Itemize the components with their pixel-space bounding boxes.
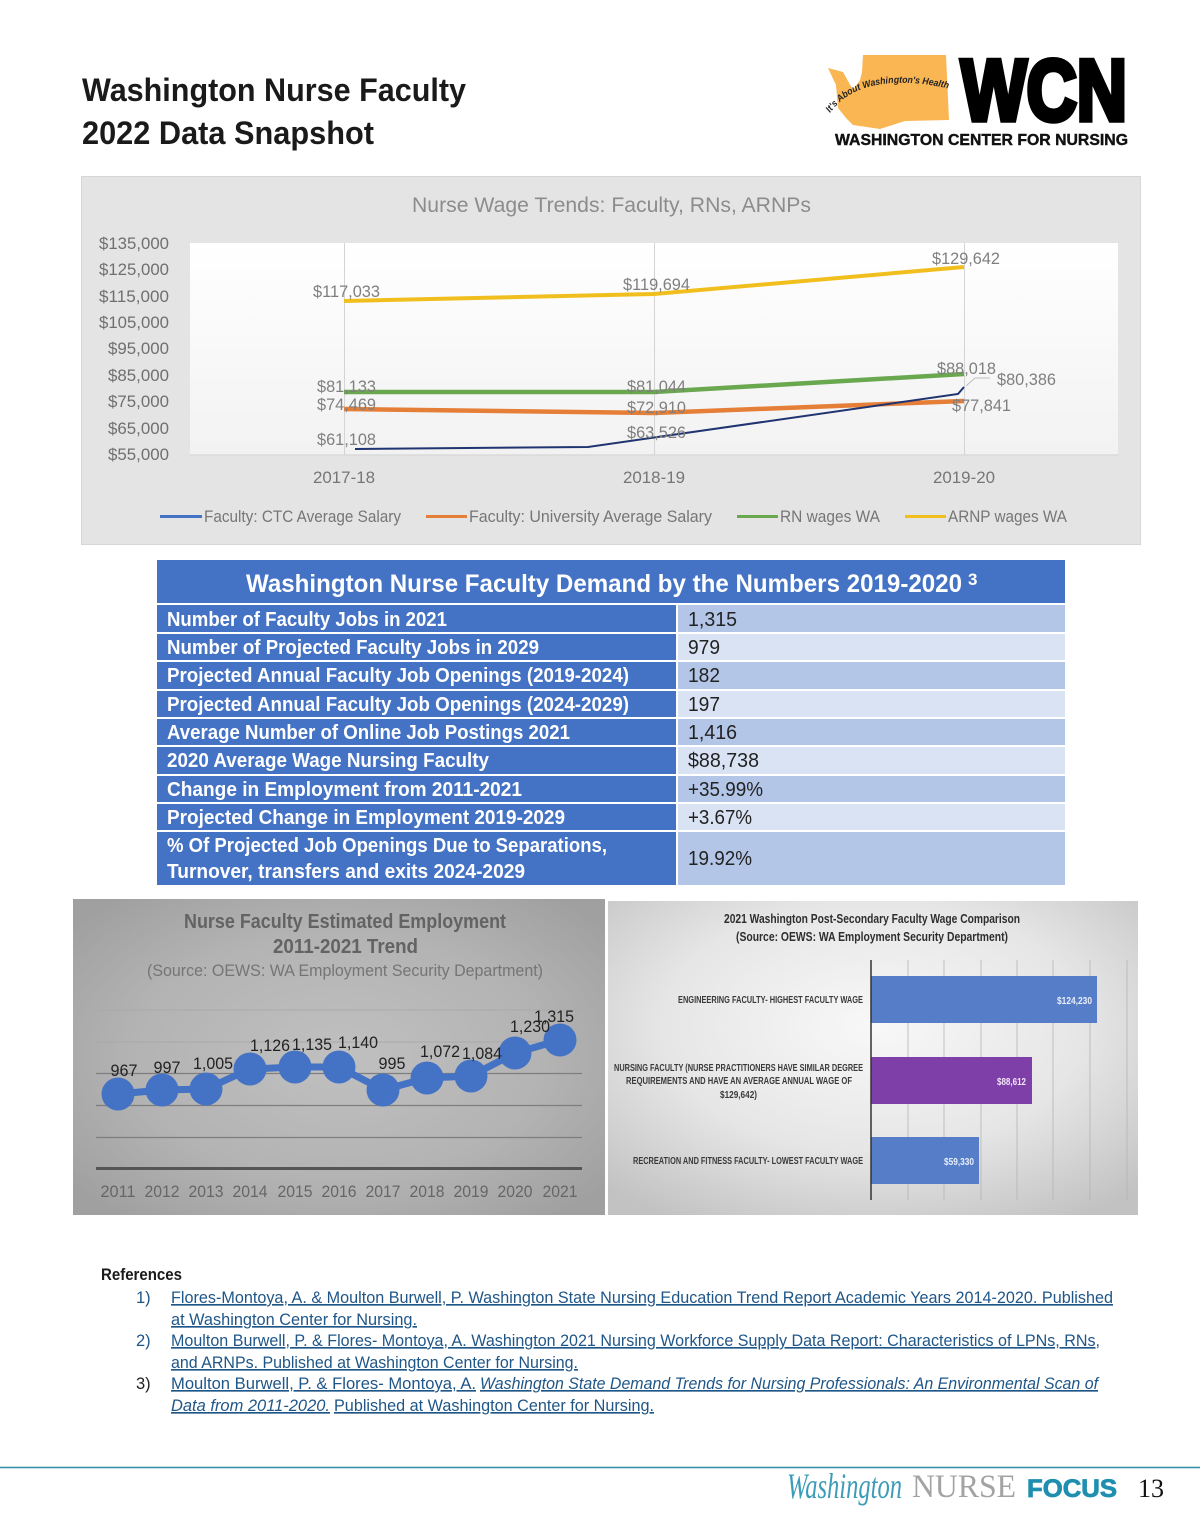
data labels: $117,033 [313,282,380,301]
series: university salary [344,401,964,413]
data labels: $81,044 [627,377,686,396]
data labels: $119,694 [623,275,690,294]
bar: nursing faculty [614,1057,1032,1104]
employment values: 1,315 [534,1007,574,1026]
employment values: 1,140 [338,1033,378,1052]
bar: engineering faculty: ENGINEERING FACULTY- HIGHEST FACULTY WAGE [678,994,863,1006]
bar: engineering faculty: $124,230 [1057,995,1092,1007]
legend: Faculty: CTC Average Salary [204,507,401,526]
y axis labels: $75,000 [108,392,169,411]
year labels: 2015 [278,1182,312,1201]
leader line [966,378,990,386]
y axis labels: $95,000 [108,339,169,358]
panel: nurse wage trends line chart [82,176,1140,544]
footer brand: Washington [787,1466,902,1506]
row: openings 2024-2029 [157,691,1065,717]
row: projected jobs 2029: Number of Projected Faculty Jobs in 2029 [167,637,539,659]
employment values: 967 [110,1061,138,1080]
data labels: $74,469 [317,395,376,414]
logo: Washington Center for Nursing [826,43,1128,149]
logo name: WASHINGTON CENTER FOR NURSING [835,132,1128,149]
title: Washington Nurse Faculty [82,72,466,108]
row: separations: 19.92% [688,848,752,870]
chart heading [147,911,543,980]
title [82,72,466,151]
panel: faculty wage comparison bar chart [608,901,1138,1215]
row: openings 2024-2029: Projected Annual Faculty Job Openings (2024-2029) [167,694,629,716]
data labels: $63,526 [627,423,686,442]
bar: nursing faculty: REQUIREMENTS AND HAVE AN AVERAGE ANNUAL WAGE OF [626,1075,852,1087]
bar: recreation faculty [633,1137,979,1184]
series: CTC salary [355,387,964,449]
reference 2: and ARNPs. Published at Washington Center for Nursing. [171,1354,578,1372]
reference 3: Washington State Demand Trends for Nursing Professionals: An Environmental Scan of [480,1375,1100,1393]
year labels: 2021 [542,1182,578,1201]
bar: nursing faculty: $129,642) [720,1089,757,1101]
employment values: 997 [154,1058,180,1077]
row: change in employment [157,776,1065,802]
row: openings 2019-2024: 182 [688,665,720,687]
data labels [313,249,1056,449]
chart heading: 2021 Washington Post-Secondary Faculty Wage Comparison [724,911,1020,926]
chart heading: (Source: OEWS: WA Employment Security Department) [147,962,543,980]
chart heading: Nurse Faculty Estimated Employment [184,911,506,933]
reference 1 [136,1289,1113,1329]
employment values: 1,126 [250,1036,290,1055]
year labels [100,1182,578,1201]
bar: nursing faculty: NURSING FACULTY (NURSE PRACTITIONERS HAVE SIMILAR DEGREE [614,1062,863,1074]
logo letters WCN: WCN [961,43,1127,139]
row: change in employment: +35.99% [688,779,763,801]
references [101,1266,1113,1415]
bar: nursing faculty: $88,612 [997,1076,1026,1088]
employment values: 995 [378,1054,406,1073]
employment values: 1,005 [193,1054,233,1073]
y axis labels [99,234,169,464]
row: projected jobs 2029 [157,634,1065,660]
row: separations: Turnover, transfers and exits 2024-2029 [167,861,525,883]
reference 2: Moulton Burwell, P. & Flores- Montoya, A. Washington 2021 Nursing Workforce Supply Data Report: Characteristics of LPNs, RNs, [171,1332,1100,1350]
y axis labels: $125,000 [99,260,169,279]
row: projected change: +3.67% [688,807,752,829]
series: RN wages [344,374,964,392]
row: projected jobs 2029: 979 [688,637,720,659]
reference 1: at Washington Center for Nursing. [171,1311,417,1329]
row: online postings [157,719,1065,745]
row: faculty jobs 2021 [157,605,1065,632]
table header: Washington Nurse Faculty Demand by the Numbers 2019-2020 [246,570,962,598]
row: online postings: Average Number of Online Job Postings 2021 [167,722,570,744]
x axis labels: 2018-19 [623,468,685,487]
bar: recreation faculty: RECREATION AND FITNESS FACULTY- LOWEST FACULTY WAGE [633,1155,863,1167]
reference 3: 3) [136,1375,151,1393]
icon: Washington state outline [828,55,949,129]
row: separations [157,832,1065,885]
reference 2: 2) [136,1332,151,1350]
footer [0,1466,1200,1506]
row: faculty jobs 2021: Number of Faculty Jobs in 2021 [167,609,447,631]
row: openings 2024-2029: 197 [688,694,720,716]
row: average wage: 2020 Average Wage Nursing Faculty [167,750,490,772]
year labels: 2016 [322,1182,356,1201]
employment values: 1,135 [292,1035,332,1054]
year labels: 2017 [366,1182,400,1201]
data labels: $61,108 [317,430,376,449]
page number: 13 [1138,1474,1164,1503]
footer brand [787,1466,1117,1506]
data labels: $81,133 [317,377,376,396]
reference 3: Data from 2011-2020. [171,1397,330,1415]
bar: recreation faculty: $59,330 [944,1156,974,1168]
row: average wage [157,747,1065,774]
y axis labels: $135,000 [99,234,169,253]
series: ARNP wages [344,267,964,301]
title: 2022 Data Snapshot [82,115,374,151]
legend [160,507,1068,526]
chart heading: (Source: OEWS: WA Employment Security Department) [736,929,1008,944]
data labels: $77,841 [952,396,1011,415]
x axis labels: 2017-18 [313,468,375,487]
chart title: Nurse Wage Trends: Faculty, RNs, ARNPs [412,194,811,217]
year labels: 2020 [498,1182,532,1201]
chart heading [724,911,1020,944]
employment trend line [102,1024,576,1110]
x axis labels [313,468,995,487]
row: projected change [157,804,1065,830]
table header [157,560,1065,603]
y axis labels: $105,000 [99,313,169,332]
row: openings 2019-2024 [157,662,1065,689]
y axis labels: $85,000 [108,366,169,385]
reference 3: Moulton Burwell, P. & Flores- Montoya, A. [171,1375,476,1393]
legend: RN wages WA [780,507,881,526]
reference 1: 1) [136,1289,151,1307]
x axis labels: 2019-20 [933,468,995,487]
employment values: 1,072 [420,1042,460,1061]
data labels: $72,910 [627,398,686,417]
bar: engineering faculty [678,976,1097,1023]
data labels: $129,642 [932,249,1000,268]
row: projected change: Projected Change in Employment 2019-2029 [167,807,565,829]
footer brand: FOCUS [1027,1475,1117,1503]
logo tagline: It's About Washington's Health [826,76,949,113]
legend: Faculty: University Average Salary [469,507,712,526]
table header: 3 [968,570,977,589]
year labels: 2019 [454,1182,488,1201]
data labels: $80,386 [997,370,1056,389]
employment values [110,1007,574,1080]
legend: ARNP wages WA [948,507,1068,526]
data labels: $88,018 [937,359,996,378]
year labels: 2013 [188,1182,224,1201]
references heading: References [101,1266,182,1284]
panel: faculty demand table [157,560,1065,885]
reference 1: Flores-Montoya, A. & Moulton Burwell, P. Washington State Nursing Education Trend Report Academic Years 2014-2020. Published [171,1289,1113,1307]
row: separations: % Of Projected Job Openings Due to Separations, [167,835,607,857]
y axis labels: $115,000 [99,287,169,306]
year labels: 2011 [100,1182,136,1201]
year labels: 2014 [232,1182,268,1201]
reference 2 [136,1332,1100,1372]
chart heading: 2011-2021 Trend [273,936,418,958]
panel: estimated employment chart [73,899,605,1215]
reference 3: Published at Washington Center for Nursing. [334,1397,654,1415]
row: openings 2019-2024: Projected Annual Faculty Job Openings (2019-2024) [167,665,629,687]
y axis labels: $55,000 [108,445,169,464]
year labels: 2012 [144,1182,180,1201]
employment values: 1,084 [462,1044,502,1063]
row: change in employment: Change in Employment from 2011-2021 [167,779,522,801]
row: average wage: $88,738 [688,750,759,772]
employment values: 1,230 [510,1017,550,1036]
footer brand: NURSE [912,1469,1016,1505]
year labels: 2018 [410,1182,444,1201]
row: online postings: 1,416 [688,722,737,744]
y axis labels: $65,000 [108,419,169,438]
row: faculty jobs 2021: 1,315 [688,609,737,631]
reference 3 [136,1375,1100,1415]
